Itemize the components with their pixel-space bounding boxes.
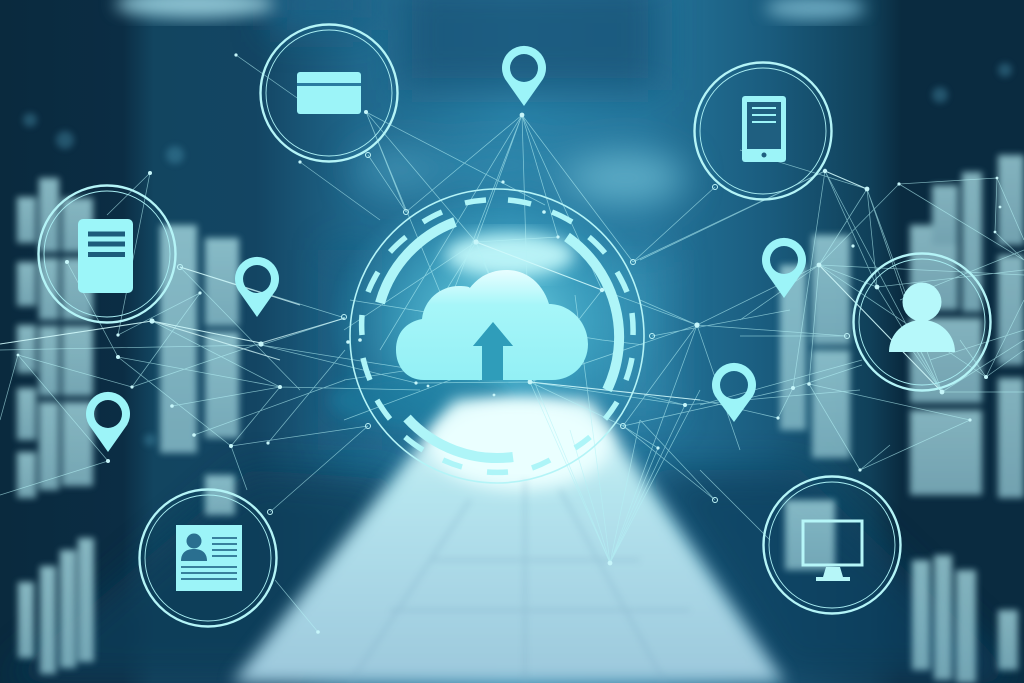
central glow [327, 185, 667, 455]
document [78, 219, 133, 293]
emblem thick arcs [380, 222, 619, 458]
icon: location pin top [502, 46, 546, 106]
icon circle: document [38, 186, 176, 322]
icon: location pin lower right [712, 363, 756, 422]
icon circle: monitor [764, 476, 900, 614]
user [889, 282, 955, 352]
icon: location pin lower left [86, 392, 130, 452]
icon: location pin left [235, 257, 279, 317]
icon circle: tablet [694, 62, 832, 200]
ceiling lights [115, 0, 865, 20]
emblem outer ring [350, 189, 644, 483]
emblem dashed segments [362, 200, 633, 472]
right rack lights [780, 155, 1024, 683]
icon: cloud with upload arrow [396, 270, 588, 380]
ceiling shading [270, 0, 685, 450]
brighter network lines [0, 171, 942, 400]
lower side shading [0, 470, 400, 683]
card [297, 72, 361, 114]
icon: location pin right [762, 238, 806, 298]
central cloud emblem [350, 189, 644, 483]
corridor floor [232, 400, 785, 683]
left rack lights [17, 178, 239, 674]
tablet [742, 96, 786, 162]
icon circle: profile card [140, 490, 276, 626]
icon circle: credit card [260, 24, 398, 162]
profile card [176, 525, 242, 591]
hollow ring nodes [178, 152, 850, 514]
server indicator spots [23, 63, 1012, 446]
monitor [803, 521, 862, 581]
icon circle: user [854, 254, 990, 390]
